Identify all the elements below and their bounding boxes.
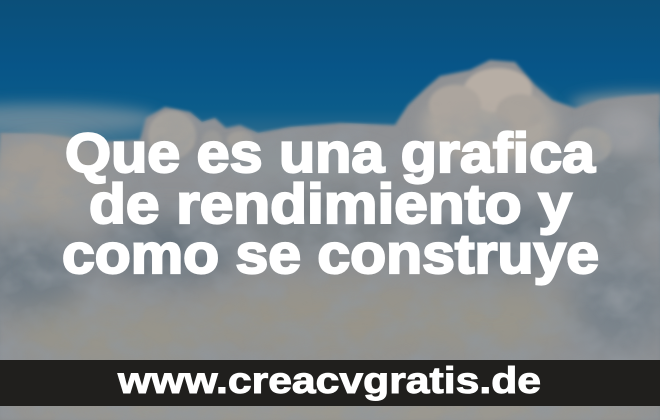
title: de rendimiento y <box>89 172 572 235</box>
title <box>62 121 599 285</box>
title: como se construye <box>62 222 599 285</box>
title: Que es una grafica <box>65 121 596 184</box>
footer bar <box>0 360 660 406</box>
website url: www.creacvgratis.de <box>117 360 541 401</box>
